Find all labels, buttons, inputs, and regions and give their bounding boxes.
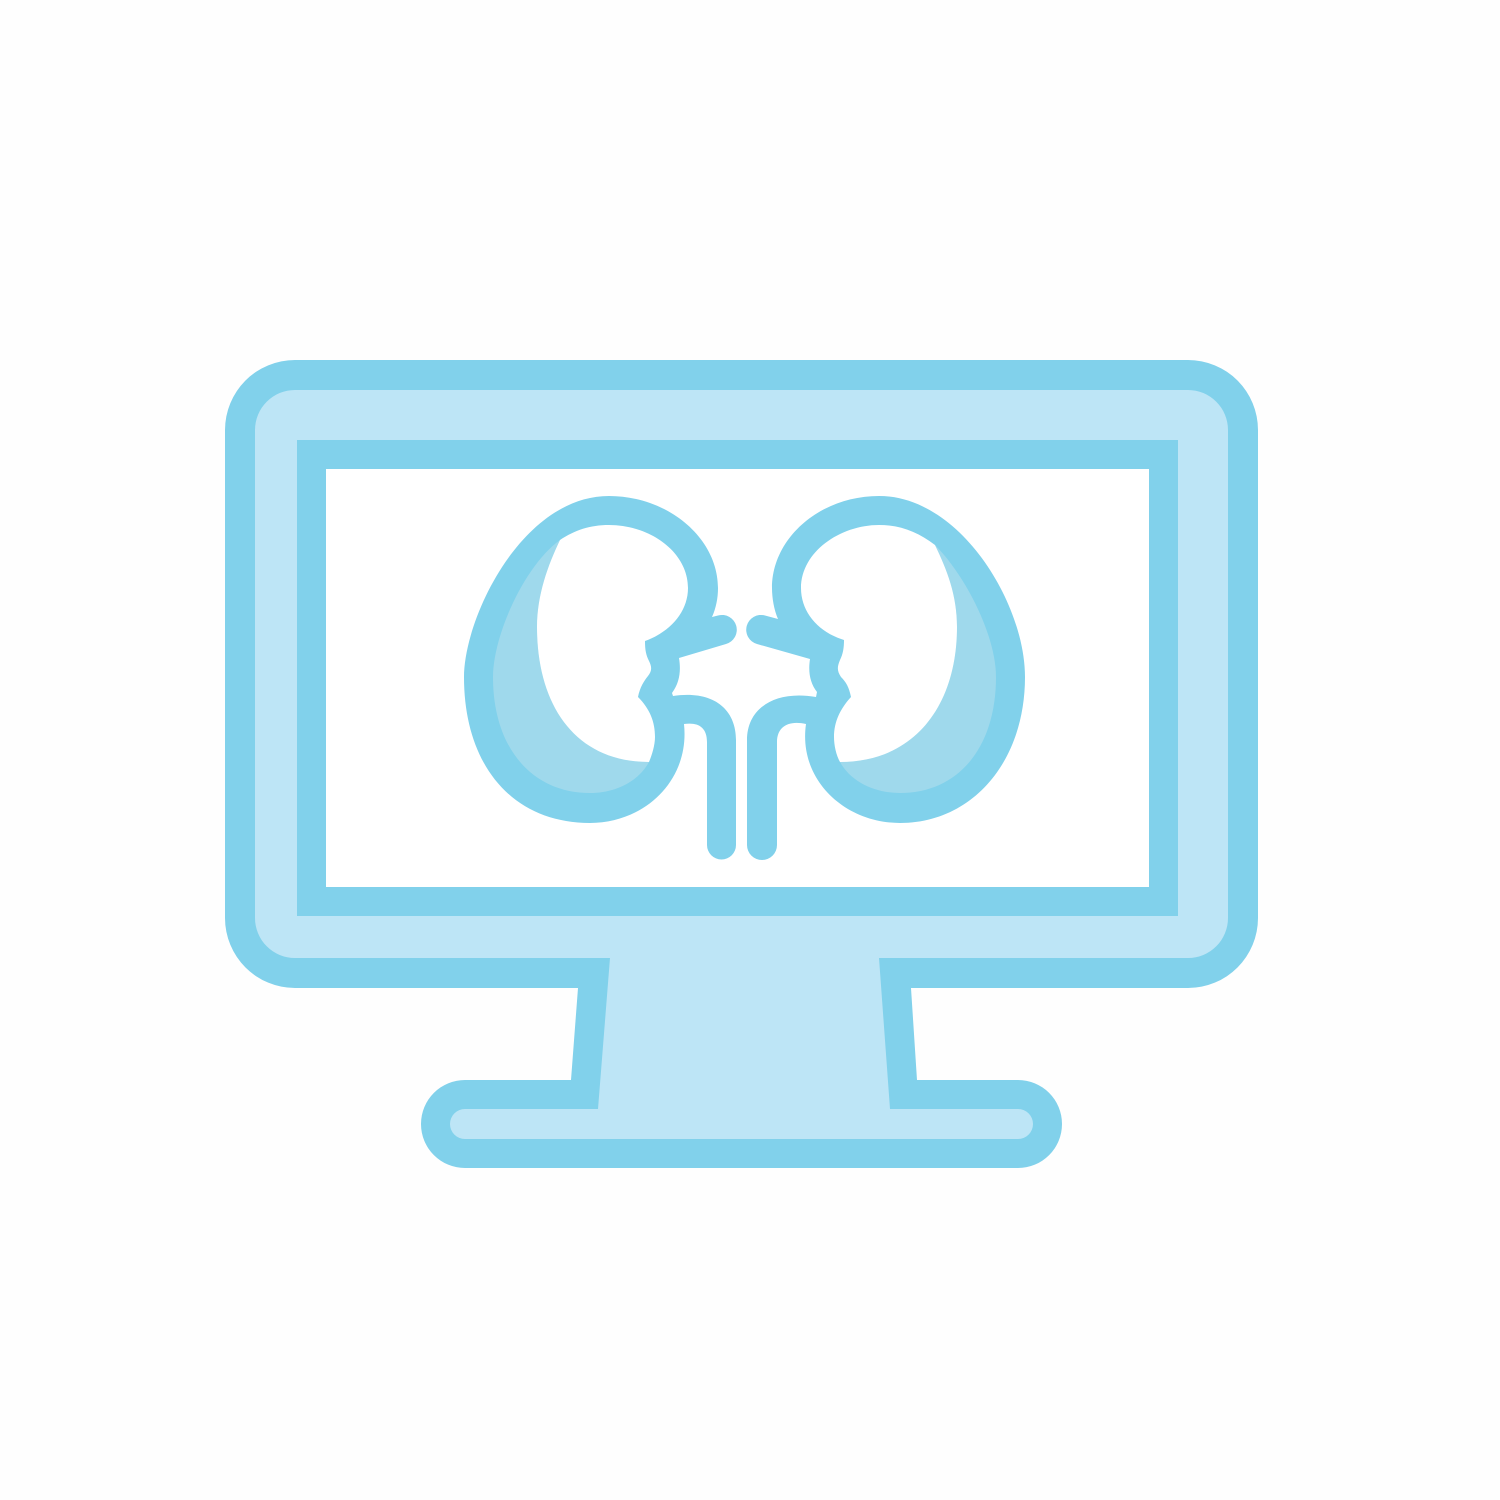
left kidney outline with vessels	[464, 496, 737, 860]
right kidney shading	[840, 545, 996, 793]
right kidney outline with vessels	[746, 496, 1025, 860]
icon: monitor	[225, 360, 1258, 1168]
left kidney interior	[537, 525, 688, 762]
screen frame	[297, 440, 1178, 916]
icon: left kidney	[464, 496, 737, 860]
right kidney interior	[801, 525, 957, 762]
left kidney shading	[493, 540, 649, 793]
monitor body and stand outline	[225, 360, 1258, 1168]
screen	[326, 469, 1149, 887]
monitor body and stand fill	[255, 390, 1228, 1139]
icon: right kidney	[746, 496, 1025, 860]
